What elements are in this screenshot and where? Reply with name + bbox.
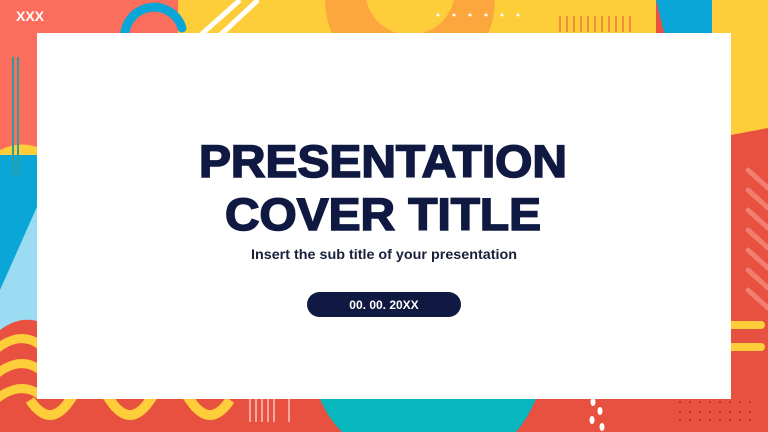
background: XXX: [16, 8, 45, 24]
date pill: 00. 00. 20XX: [349, 298, 419, 312]
subtitle: Insert the sub title of your presentation: [251, 246, 517, 262]
date pill: [307, 292, 461, 317]
title: COVER TITLE: [225, 189, 541, 240]
title: [199, 136, 567, 240]
white card: [37, 33, 731, 399]
title: PRESENTATION: [199, 136, 567, 187]
